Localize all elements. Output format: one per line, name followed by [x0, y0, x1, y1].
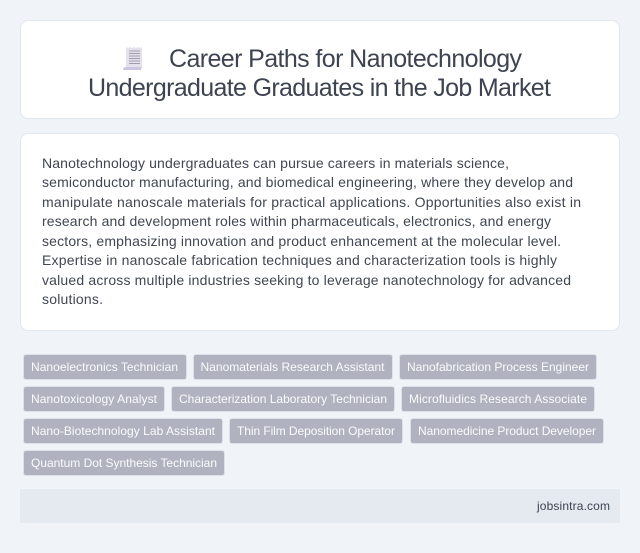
- body text: Nanotechnology undergraduates can pursue careers in materials science,: [42, 155, 509, 171]
- chip labels: Characterization Laboratory Technician: [179, 392, 387, 406]
- footer text: jobsintra.com: [536, 499, 610, 513]
- body text: valued across multiple industries seeking to leverage nanotechnology for advanced: [42, 272, 571, 288]
- chip labels: Microfluidics Research Associate: [409, 392, 587, 406]
- title: Career Paths for Nanotechnology: [169, 45, 522, 73]
- body text: Expertise in nanoscale fabrication techniques and characterization tools is highly: [42, 252, 557, 268]
- chip labels: Nanomaterials Research Assistant: [200, 360, 385, 374]
- body text: sectors, emphasizing innovation and product enhancement at the molecular level.: [42, 233, 561, 249]
- chip labels: [31, 360, 596, 470]
- chip labels: Nanoelectronics Technician: [31, 360, 178, 374]
- footer bar: [20, 489, 620, 523]
- chip labels: Nanotoxicology Analyst: [31, 392, 158, 406]
- title: [88, 45, 551, 102]
- body text: [42, 155, 581, 307]
- chip labels: Thin Film Deposition Operator: [237, 424, 395, 438]
- body panel: [20, 133, 620, 331]
- body text: solutions.: [42, 291, 103, 307]
- body text: semiconductor manufacturing, and biomedical engineering, where they develop and: [42, 174, 573, 190]
- body text: manipulate nanoscale materials for practical applications. Opportunities also exist in: [42, 194, 581, 210]
- chip labels: Nanomedicine Product Developer: [418, 424, 596, 438]
- chip labels: Nano-Biotechnology Lab Assistant: [31, 424, 216, 438]
- chip labels: Quantum Dot Synthesis Technician: [31, 456, 217, 470]
- icon: document scroll: [123, 47, 142, 70]
- chip labels: Nanofabrication Process Engineer: [407, 360, 589, 374]
- title: Undergraduate Graduates in the Job Market: [88, 74, 551, 102]
- header panel: [20, 20, 620, 119]
- body text: research and development roles within pharmaceuticals, electronics, and energy: [42, 213, 551, 229]
